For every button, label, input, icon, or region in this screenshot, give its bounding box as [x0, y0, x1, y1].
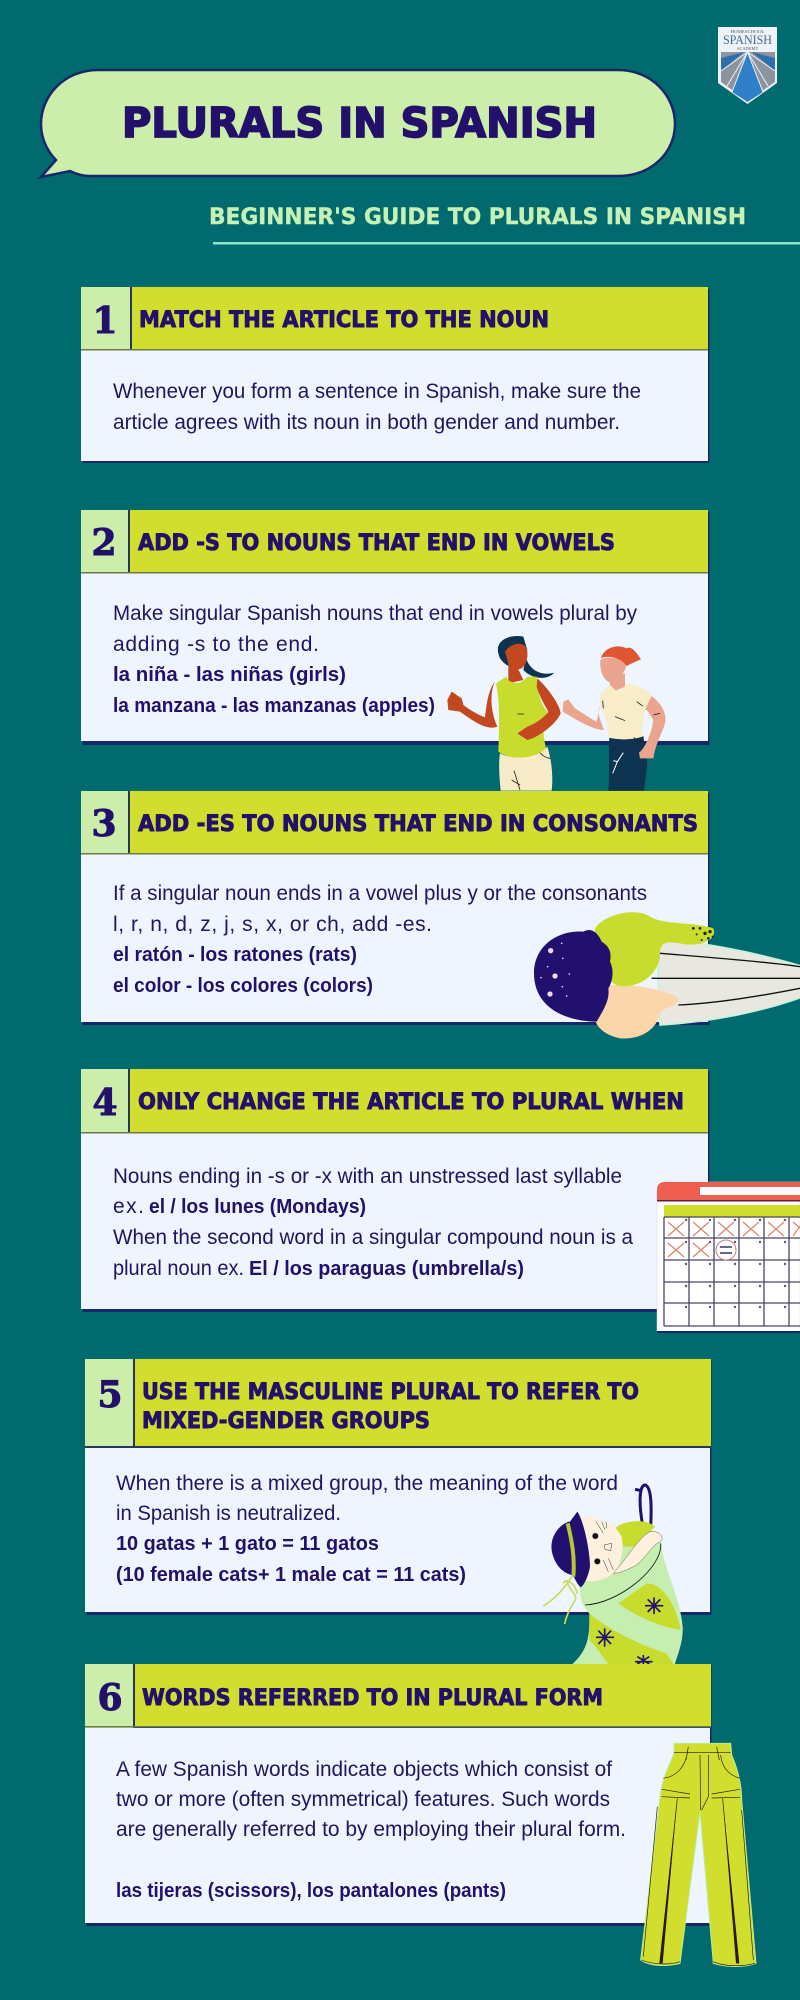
panel: section 3	[81, 791, 710, 1025]
body text 5: When there is a mixed group, the meaning of the word	[116, 1472, 618, 1495]
panel: section 5	[85, 1359, 712, 1615]
title speech bubble	[41, 70, 675, 177]
panel: section 2	[81, 510, 710, 745]
heading 6: WORDS REFERRED TO IN PLURAL FORM	[142, 1686, 603, 1711]
heading 5	[142, 1380, 639, 1434]
number 3: 3	[91, 803, 117, 845]
panel: section 6	[85, 1664, 712, 1926]
heading 5: MIXED-GENDER GROUPS	[142, 1409, 430, 1434]
body text 3: l, r, n, d, z, j, s, x, or ch, add -es.	[113, 913, 432, 936]
body text 5	[116, 1472, 618, 1586]
panel: section 4	[81, 1069, 710, 1312]
number 5: 5	[97, 1374, 123, 1416]
body text 3: el color - los colores (colors)	[113, 975, 373, 997]
body text 3: If a singular noun ends in a vowel plus y or the consonants	[113, 882, 647, 905]
logo: HOMESCHOOL	[730, 29, 765, 34]
body text 4: plural noun ex.	[113, 1257, 244, 1280]
body text 2	[113, 602, 637, 717]
illustration: ice cream cone	[534, 912, 800, 1039]
number 2: 2	[91, 522, 117, 564]
illustration: pants	[641, 1743, 756, 1966]
body text 2: Make singular Spanish nouns that end in vowels plural by	[113, 602, 637, 625]
body text 4: ex.	[113, 1195, 144, 1218]
heading 5: USE THE MASCULINE PLURAL TO REFER TO	[142, 1380, 639, 1405]
number 1: 1	[92, 300, 118, 342]
heading 4: ONLY CHANGE THE ARTICLE TO PLURAL WHEN	[138, 1090, 684, 1115]
body text 5: in Spanish is neutralized.	[116, 1502, 341, 1525]
illustration: two women walking	[447, 636, 666, 791]
body text 4	[113, 1165, 633, 1280]
heading 1: MATCH THE ARTICLE TO THE NOUN	[139, 308, 549, 333]
body text 2: la niña - las niñas (girls)	[113, 664, 346, 686]
body text 2: la manzana - las manzanas (apples)	[113, 695, 435, 717]
subtitle: BEGINNER'S GUIDE TO PLURALS IN SPANISH	[209, 205, 746, 230]
panel: section 1	[81, 287, 710, 463]
body text 1: Whenever you form a sentence in Spanish, make sure the	[113, 380, 641, 403]
body text 6: A few Spanish words indicate objects which consist of	[116, 1758, 612, 1781]
number 6: 6	[97, 1677, 123, 1719]
body text 6: are generally referred to by employing their plural form.	[116, 1818, 626, 1841]
title: PLURALS IN SPANISH	[122, 99, 597, 147]
body text 2: adding -s to the end.	[113, 633, 319, 656]
heading 2: ADD -S TO NOUNS THAT END IN VOWELS	[138, 531, 615, 556]
body text 6: las tijeras (scissors), los pantalones (pants)	[116, 1880, 506, 1902]
body text 5: (10 female cats+ 1 male cat = 11 cats)	[116, 1564, 466, 1586]
body text 3	[113, 882, 647, 997]
number 4: 4	[92, 1082, 118, 1124]
body text 1	[113, 380, 641, 434]
logo: SPANISH	[723, 32, 772, 47]
body text 5: 10 gatas + 1 gato = 11 gatos	[116, 1533, 379, 1555]
body text 1: article agrees with its noun in both gender and number.	[113, 411, 620, 434]
body text 6	[116, 1758, 626, 1902]
body text 3: el ratón - los ratones (rats)	[113, 944, 357, 966]
body text 4: Nouns ending in -s or -x with an unstressed last syllable	[113, 1165, 622, 1188]
illustration: swaddled baby	[543, 1485, 683, 1664]
logo: ACADEMY	[736, 46, 759, 51]
body text 4: el / los lunes (Mondays)	[149, 1196, 366, 1218]
logo	[718, 27, 777, 104]
illustration: calendar	[657, 1182, 800, 1333]
body text 4: El / los paraguas (umbrella/s)	[249, 1258, 524, 1280]
body text 6: two or more (often symmetrical) features. Such words	[116, 1788, 610, 1811]
heading 3: ADD -ES TO NOUNS THAT END IN CONSONANTS	[138, 812, 698, 837]
body text 4: When the second word in a singular compound noun is a	[113, 1226, 633, 1249]
